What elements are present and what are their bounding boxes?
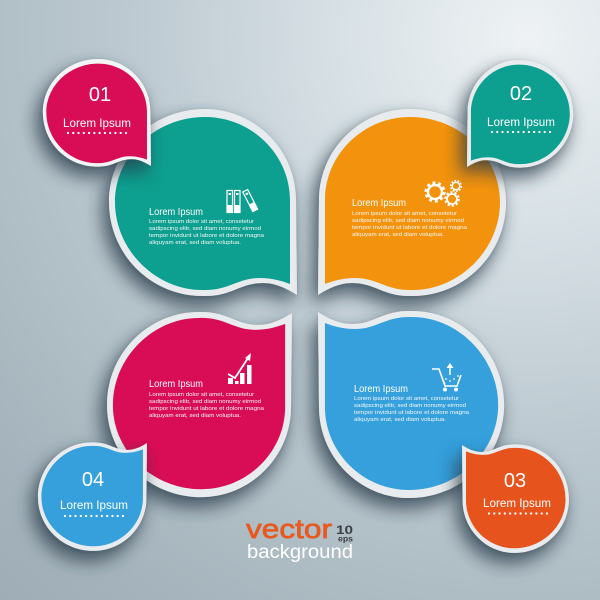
badge 04 dotted rule <box>65 515 123 517</box>
text: blue panel copy: Lorem ipsum dolor sit amet, consetetur <box>354 396 459 402</box>
logo: vector background 10 eps: background <box>247 542 353 563</box>
badge 03 shape <box>462 444 569 553</box>
text: orange panel copy: tempor invidunt ut labore et dolore magna <box>352 225 468 231</box>
badge 01 number: 01 <box>89 84 111 106</box>
text: blue panel copy: sadipscing elitr, sed diam nonumy eirmod <box>354 403 466 409</box>
logo: vector background 10 eps: eps <box>338 534 354 544</box>
text: teal panel copy: tempor invidunt ut labore et dolore magna <box>149 233 265 239</box>
panel: orange <box>318 109 506 296</box>
text: teal panel copy: Lorem ipsum dolor sit amet, consetetur <box>149 219 254 225</box>
badge 01 dotted rule <box>68 132 126 134</box>
text: blue panel copy: tempor invidunt ut labore et dolore magna <box>354 410 470 416</box>
blue drop shape <box>318 311 504 498</box>
orange drop shape <box>318 109 506 296</box>
badge 01 shape <box>43 59 151 167</box>
text: crimson panel copy: Lorem ipsum dolor sit amet, consetetur <box>149 392 254 398</box>
text: teal panel copy: Lorem Ipsum <box>149 207 203 218</box>
badge 04 label: Lorem Ipsum <box>60 498 128 512</box>
text: orange panel copy: Lorem ipsum dolor sit amet, consetetur <box>352 211 457 217</box>
text: crimson panel copy <box>149 379 265 419</box>
text: blue panel copy: Lorem Ipsum <box>354 384 408 395</box>
crimson drop shape <box>107 312 292 497</box>
badge: 01 <box>43 59 151 167</box>
panel: blue <box>318 311 504 498</box>
text: orange panel copy: sadipscing elitr, sed diam nonumy eirmod <box>352 218 464 224</box>
panel: teal <box>109 109 297 296</box>
logo: vector background 10 eps <box>246 514 354 563</box>
teal drop shape <box>109 109 297 296</box>
badge 02 shape <box>467 60 573 168</box>
icon: gears <box>426 181 461 206</box>
text: teal panel copy <box>149 207 265 246</box>
text: crimson panel copy: Lorem Ipsum <box>149 379 203 390</box>
badge 04 shape <box>38 442 147 551</box>
logo: vector background 10 eps: 10 <box>336 525 353 537</box>
icon: growth chart <box>228 353 252 384</box>
icon: shopping cart <box>432 363 461 392</box>
text: orange panel copy <box>352 198 468 238</box>
badge: 02 <box>467 60 573 168</box>
panel: crimson <box>107 312 292 497</box>
badge 02 label: Lorem Ipsum <box>487 115 555 129</box>
badge 03 label: Lorem Ipsum <box>483 496 551 510</box>
badge: 03 <box>462 444 569 553</box>
text: blue panel copy <box>354 384 470 423</box>
text: teal panel copy: aliquyam erat, sed diam voluptua. <box>149 240 241 246</box>
badge 02 dotted rule <box>492 131 550 133</box>
badge 01 label: Lorem Ipsum <box>63 116 131 130</box>
badge 04 number: 04 <box>82 469 104 491</box>
badge 03 number: 03 <box>504 470 526 492</box>
text: blue panel copy: aliquyam erat, sed diam voluptua. <box>354 417 446 423</box>
text: crimson panel copy: tempor invidunt ut labore et dolore magna <box>149 406 265 412</box>
text: crimson panel copy: sadipscing elitr, sed diam nonumy eirmod <box>149 399 261 405</box>
badge 03 dotted rule <box>489 512 547 515</box>
text: teal panel copy: sadipscing elitr, sed diam nonumy eirmod <box>149 226 261 232</box>
badge 02 number: 02 <box>510 83 532 105</box>
logo: vector background 10 eps: vector <box>246 514 332 544</box>
icon: binders <box>227 190 258 212</box>
text: orange panel copy: aliquyam erat, sed diam voluptua. <box>352 232 444 238</box>
text: crimson panel copy: aliquyam erat, sed diam voluptua. <box>149 413 241 419</box>
badge: 04 <box>38 442 147 551</box>
text: orange panel copy: Lorem Ipsum <box>352 198 406 209</box>
